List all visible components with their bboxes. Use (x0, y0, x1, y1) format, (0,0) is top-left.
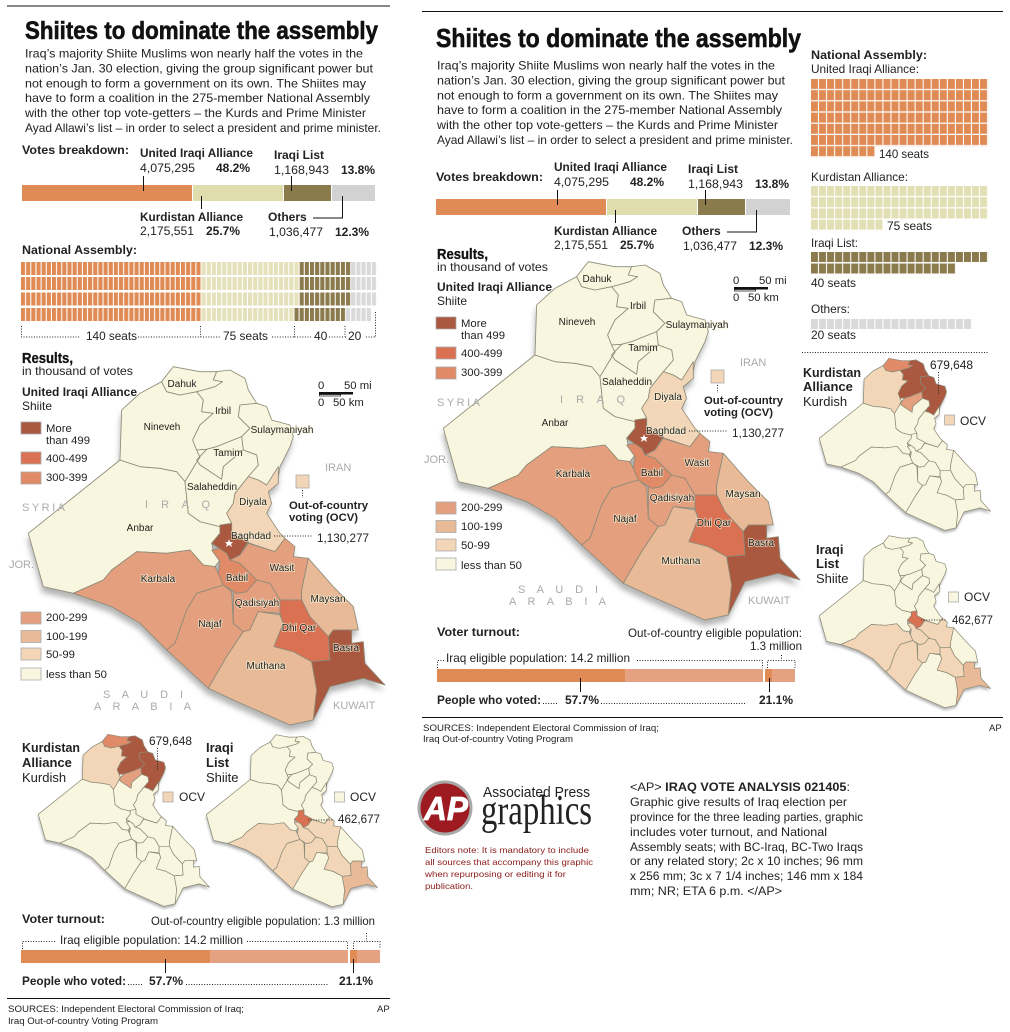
AP advisory text: includes voter turnout, and National (630, 825, 827, 839)
left main map: Nineveh (144, 422, 180, 433)
left main map: Dhi Qar (282, 623, 317, 634)
AP advisory text: <AP> IRAQ VOTE ANALYSIS 021405 : (630, 780, 850, 794)
left voter turnout chart: 57.7% (149, 974, 183, 988)
right Iraqi List map: List (816, 556, 840, 571)
right intro text (436, 58, 793, 147)
right results heading: Shiite (437, 294, 467, 308)
right national assembly seats: 40 seats (811, 276, 856, 290)
left national assembly seats chart: 20 (348, 329, 362, 343)
left intro text: not enough to form a government on its own. The Shiites may (25, 76, 366, 90)
right Kurdistan Alliance map (803, 358, 990, 533)
left intro text: Ayad Allawi’s list – in order to select a president and prime minister. (25, 121, 381, 135)
right out-of-country callout: Out-of-country (704, 395, 784, 407)
left out-of-country callout (274, 475, 369, 545)
left main map: Karbala (141, 574, 176, 585)
right out-of-country callout: voting (OCV) (704, 407, 773, 419)
left main map: Muthana (247, 661, 286, 672)
left votes breakdown: Votes breakdown: (22, 143, 129, 157)
right votes breakdown: United Iraqi Alliance (554, 160, 667, 174)
left votes breakdown: 2,175,551 (140, 224, 194, 238)
right national assembly seats: Iraqi List: (811, 236, 858, 250)
right Kurdistan Alliance map: Kurdish (803, 394, 847, 409)
left map scale (318, 380, 372, 409)
left national assembly seats chart: National Assembly: (22, 243, 137, 257)
right voter turnout chart: Iraq eligible population: 14.2 million (446, 651, 630, 665)
Associated Press graphics logo: AP (423, 790, 469, 827)
left main map: Sulaymaniyah (251, 425, 313, 436)
left map legend lower (21, 612, 107, 681)
right map legend upper: than 499 (461, 330, 505, 342)
right map legend lower: less than 50 (461, 560, 522, 572)
AP advisory text: province for the three leading parties, graphic (630, 810, 863, 824)
left Iraqi List map (206, 735, 380, 909)
right map legend lower: 50-99 (461, 540, 490, 552)
left Kurdistan Alliance map: 679,648 (149, 734, 192, 748)
left sources (7, 998, 390, 1027)
left map scale: 50 mi (344, 380, 372, 392)
editors note: all sources that accompany this graphic (425, 857, 594, 867)
left national assembly seats chart (21, 243, 377, 343)
Associated Press graphics logo (418, 780, 592, 836)
left main map: A R A B I A (94, 701, 192, 713)
right map legend upper: 300-399 (461, 367, 502, 379)
right intro text: Ayad Allawi’s list – in order to select a president and prime minister. (437, 133, 793, 147)
right national assembly seats: United Iraqi Alliance: (811, 62, 919, 76)
left map legend upper: than 499 (46, 435, 90, 447)
editors note: when repurposing or editing it for (424, 869, 566, 879)
right map legend upper: More (461, 318, 487, 330)
left main map: Najaf (198, 619, 222, 630)
left map legend upper (21, 422, 90, 484)
AP advisory text: Assembly seats; with BC-Iraq, BC-Two Iraqs (630, 840, 863, 854)
left map legend lower: 50-99 (46, 649, 75, 661)
right sources: SOURCES: Independent Electoral Commission of Iraq; (423, 723, 659, 734)
left national assembly seats chart: 40 (314, 329, 328, 343)
right Kurdistan Alliance map: Kurdistan (803, 365, 861, 380)
left main map: S A U D I (103, 689, 183, 701)
right voter turnout chart: 1.3 million (750, 639, 802, 653)
left main map: Tamim (213, 448, 243, 459)
right votes breakdown (436, 160, 790, 253)
left votes breakdown: 1,168,943 (274, 163, 329, 177)
right intro text: have to form a coalition in the 275-member National Assembly (437, 103, 782, 117)
right sources: AP (989, 723, 1002, 734)
right main map: JOR. (424, 454, 449, 466)
left Kurdistan Alliance map: Kurdistan (22, 740, 80, 755)
left map legend lower: less than 50 (46, 669, 107, 681)
left votes breakdown: Iraqi List (274, 148, 324, 162)
AP advisory text: x 256 mm; 3c x 7 1/4 inches; 146 mm x 184 (630, 869, 863, 883)
left votes breakdown: 13.8% (341, 163, 375, 177)
right main map: IRAN (740, 357, 766, 369)
editors note (424, 845, 594, 891)
right main map: Basra (748, 538, 774, 549)
left voter turnout chart (21, 912, 380, 988)
right map scale: 0 (733, 275, 739, 287)
left Kurdistan Alliance map: Alliance (22, 755, 72, 770)
left voter turnout chart: Out-of-country eligible population: 1.3 million (151, 914, 375, 928)
left voter turnout chart: Iraq eligible population: 14.2 million (60, 933, 243, 947)
right Kurdistan Alliance map: Alliance (803, 379, 853, 394)
right voter turnout chart: Voter turnout: (437, 625, 520, 639)
right voter turnout chart: Out-of-country eligible population: (628, 626, 802, 640)
left votes breakdown (22, 143, 375, 239)
right main map: Dahuk (583, 274, 612, 285)
right national assembly seats: Others: (811, 302, 850, 316)
left main map: Dahuk (168, 379, 197, 390)
top rule left (7, 5, 390, 7)
right headline: Shiites to dominate the assembly (436, 23, 801, 53)
left main map: IRAN (325, 462, 351, 474)
right main map: Irbil (630, 301, 646, 312)
left map scale: 0 (318, 380, 324, 392)
AP advisory text: Graphic give results of Iraq election per (630, 795, 847, 809)
right main map: Anbar (542, 418, 569, 429)
left sources: AP (377, 1004, 390, 1015)
left voter turnout chart: Voter turnout: (22, 912, 105, 926)
right main map: Karbala (556, 469, 591, 480)
left main map: Qadisiyah (235, 598, 279, 609)
right map legend upper (436, 317, 505, 379)
left map legend upper: More (46, 423, 72, 435)
right national assembly seats: Kurdistan Alliance: (811, 170, 908, 184)
right main map: Muthana (662, 556, 701, 567)
right main map: Qadisiyah (650, 493, 694, 504)
left headline: Shiites to dominate the assembly (25, 17, 378, 45)
right Iraqi List map: OCV (964, 590, 990, 604)
right national assembly seats: National Assembly: (811, 48, 927, 62)
left Iraqi List map: Iraqi (206, 740, 233, 755)
left intro text: have to form a coalition in the 275-member National Assembly (25, 91, 370, 105)
right votes breakdown: 4,075,295 (554, 175, 609, 189)
left main map: Wasit (270, 563, 295, 574)
left map legend lower: 200-299 (46, 612, 87, 624)
right main map: A R A B I A (509, 596, 607, 608)
left votes breakdown: 12.3% (335, 225, 369, 239)
right map scale: 50 mi (759, 275, 787, 287)
right Kurdistan Alliance map: OCV (960, 414, 986, 428)
left results heading: Shiite (22, 399, 52, 413)
left intro text: nation’s Jan. 30 election, giving the group significant power but (25, 62, 374, 76)
left intro text: Iraq’s majority Shiite Muslims won nearly half the votes in the (25, 46, 363, 60)
right out-of-country callout (689, 370, 784, 440)
right main map: S A U D I (518, 584, 598, 596)
Associated Press graphics logo: graphics (481, 788, 592, 834)
left main map: SYRIA (22, 502, 66, 514)
left main map: Anbar (127, 523, 154, 534)
left out-of-country callout: voting (OCV) (289, 512, 358, 524)
left main map: Babil (226, 573, 248, 584)
right intro text: not enough to form a government on its own. The Shiites may (437, 88, 778, 102)
right main map: Tamim (628, 343, 658, 354)
right map legend lower (436, 502, 522, 572)
right main map: Salaheddin (602, 377, 652, 388)
left main map: Irbil (215, 406, 231, 417)
left votes breakdown: Others (268, 210, 307, 224)
right map legend lower: 200-299 (461, 502, 502, 514)
right main map: Najaf (613, 514, 637, 525)
right votes breakdown: 48.2% (630, 175, 664, 189)
right map scale (733, 275, 787, 304)
left votes breakdown: Kurdistan Alliance (140, 210, 243, 224)
left votes breakdown: 48.2% (216, 161, 250, 175)
left out-of-country callout: Out-of-country (289, 500, 369, 512)
right results heading: Results, (437, 246, 488, 263)
right votes breakdown: 25.7% (620, 238, 654, 252)
left Kurdistan Alliance map: Kurdish (22, 770, 66, 785)
left intro text (24, 46, 381, 135)
right map scale: 50 km (748, 292, 779, 304)
right national assembly seats: 20 seats (811, 328, 856, 342)
left Kurdistan Alliance map: OCV (179, 790, 205, 804)
left Iraqi List map: OCV (350, 790, 376, 804)
right Kurdistan Alliance map: 679,648 (930, 358, 973, 372)
AP advisory text: or any related story; 2c x 10 inches; 96 mm (630, 854, 863, 868)
Associated Press graphics logo: Associated Press (483, 785, 590, 801)
left main map: KUWAIT (333, 700, 376, 712)
editors note: Editors note: It is mandatory to include (425, 845, 589, 855)
left votes breakdown: 4,075,295 (140, 161, 195, 175)
editors note: publication. (425, 881, 473, 891)
right votes breakdown: 1,036,477 (683, 239, 737, 253)
right votes breakdown: Others (682, 224, 721, 238)
left sources: SOURCES: Independent Electoral Commission of Iraq; (8, 1004, 244, 1015)
left national assembly seats chart: 140 seats (86, 329, 137, 343)
left main map: Salaheddin (187, 482, 237, 493)
right voter turnout chart: 57.7% (565, 693, 599, 707)
right main map: SYRIA (437, 397, 481, 409)
right main map: Dhi Qar (697, 518, 732, 529)
right sources (422, 718, 1003, 745)
left results heading (22, 350, 137, 413)
left main map: Diyala (239, 497, 267, 508)
right sources: Iraq Out-of-country Voting Program (423, 734, 573, 745)
right votes breakdown: Iraqi List (688, 162, 738, 176)
left map legend upper: 400-499 (46, 453, 87, 465)
left votes breakdown: 25.7% (206, 224, 240, 238)
left main map: I R A Q (145, 499, 210, 511)
left main map (9, 367, 385, 731)
right main map: Baghdad (646, 426, 686, 437)
right main map: Sulaymaniyah (666, 320, 728, 331)
left Iraqi List map: List (206, 755, 230, 770)
left Kurdistan Alliance map (22, 734, 210, 909)
right national assembly seats: 75 seats (887, 219, 932, 233)
left map scale: 50 km (333, 397, 364, 409)
right results heading: in thousand of votes (437, 260, 548, 274)
left out-of-country callout: 1,130,277 (317, 531, 369, 545)
left map legend upper: 300-399 (46, 472, 87, 484)
left Iraqi List map: 462,677 (338, 812, 380, 826)
left main map: Baghdad (231, 531, 271, 542)
left results heading: Results, (22, 350, 73, 367)
right voter turnout chart (437, 625, 802, 707)
left votes breakdown: United Iraqi Alliance (140, 146, 253, 160)
right map legend lower: 100-199 (461, 521, 502, 533)
right intro text: nation’s Jan. 30 election, giving the group significant power but (437, 74, 786, 88)
right votes breakdown: 1,168,943 (688, 177, 743, 191)
left sources: Iraq Out-of-country Voting Program (8, 1016, 158, 1027)
right Iraqi List map: 462,677 (952, 613, 993, 627)
right intro text: with the other top vote-getters – the Kurds and Prime Minister (436, 118, 778, 132)
AP advisory text (630, 780, 863, 898)
left main map: Maysan (310, 594, 346, 605)
right main map (424, 262, 800, 626)
right votes breakdown: 12.3% (749, 239, 783, 253)
right main map: Nineveh (559, 317, 595, 328)
left intro text: with the other top vote-getters – the Kurds and Prime Minister (24, 106, 366, 120)
right main map: KUWAIT (748, 595, 791, 607)
right votes breakdown: 13.8% (755, 177, 789, 191)
right main map: Wasit (685, 458, 710, 469)
AP advisory text: mm; NR; ETA 6 p.m. </AP> (630, 884, 782, 898)
right results heading: United Iraqi Alliance (437, 280, 552, 294)
left voter turnout chart: People who voted: (22, 974, 126, 988)
right voter turnout chart: 21.1% (759, 693, 793, 707)
right national assembly seats: 140 seats (879, 147, 929, 161)
right Iraqi List map (816, 536, 993, 710)
top rule right (422, 10, 1003, 12)
right main map: Diyala (654, 392, 682, 403)
right map scale: 0 (733, 292, 739, 304)
right votes breakdown: Kurdistan Alliance (554, 224, 657, 238)
left results heading: United Iraqi Alliance (22, 385, 137, 399)
right out-of-country callout: 1,130,277 (732, 426, 784, 440)
left main map: Basra (333, 643, 359, 654)
left votes breakdown: 1,036,477 (269, 225, 323, 239)
right results heading (437, 246, 552, 308)
right main map: Babil (641, 468, 663, 479)
right votes breakdown: 2,175,551 (554, 238, 608, 252)
right main map: Maysan (725, 489, 761, 500)
left results heading: in thousand of votes (22, 364, 133, 378)
left national assembly seats chart: 75 seats (223, 329, 268, 343)
left map legend lower: 100-199 (46, 631, 87, 643)
right map legend upper: 400-499 (461, 348, 502, 360)
right votes breakdown: Votes breakdown: (436, 170, 543, 184)
right intro text: Iraq’s majority Shiite Muslims won nearly half the votes in the (437, 58, 775, 72)
right main map: I R A Q (560, 394, 625, 406)
left map scale: 0 (318, 397, 324, 409)
right Iraqi List map: Iraqi (816, 542, 843, 557)
right national assembly seats (802, 48, 988, 352)
left voter turnout chart: 21.1% (339, 974, 373, 988)
left main map: JOR. (9, 559, 34, 571)
left Iraqi List map: Shiite (206, 770, 239, 785)
right voter turnout chart: People who voted: (437, 693, 541, 707)
right Iraqi List map: Shiite (816, 571, 849, 586)
